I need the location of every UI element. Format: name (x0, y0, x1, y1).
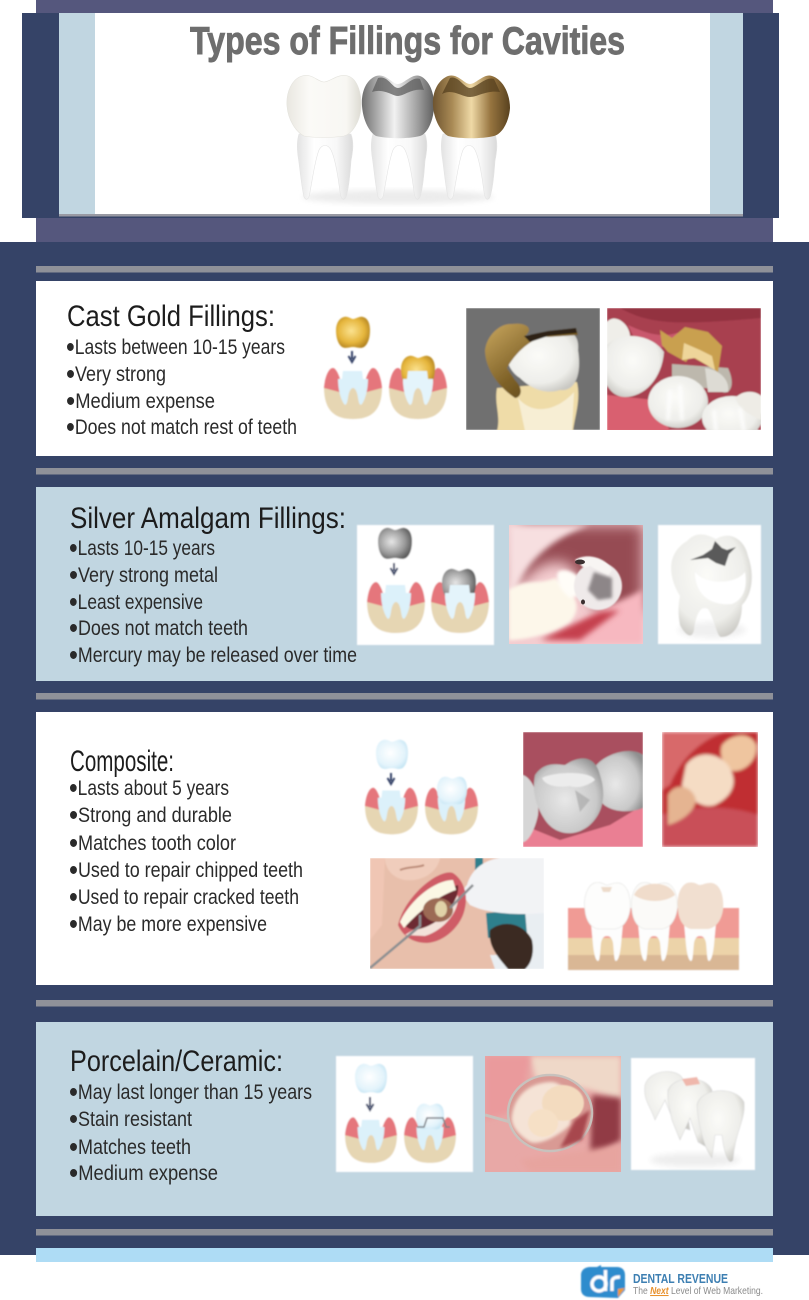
photo: molars with composite (523, 732, 643, 847)
header banner (22, 0, 779, 242)
list: silver amalgam facts: •Least expensive (69, 586, 203, 619)
wordmark: DENTAL REVENUE (633, 1272, 728, 1286)
heading: porcelain ceramic: Porcelain/Ceramic: (70, 1045, 283, 1078)
list: porcelain facts: •Stain resistant (69, 1103, 192, 1136)
list: composite facts: •Used to repair chipped teeth (69, 854, 303, 887)
heading: composite: Composite: (70, 745, 174, 778)
diagram: porcelain filling steps (336, 1056, 473, 1172)
panel: porcelain ceramic fillings (36, 1022, 773, 1216)
list: porcelain facts: •Medium expense (69, 1157, 218, 1190)
illustration: three composite teeth in gum (568, 882, 739, 970)
divider strips (36, 266, 773, 1236)
list: composite facts: •Matches tooth color (69, 827, 236, 860)
list: cast gold facts: •Does not match rest of teeth (66, 411, 297, 444)
list: porcelain facts: •Matches teeth (69, 1131, 191, 1164)
photo: dental mirror reflecting ceramic filling (485, 1056, 621, 1172)
list: composite facts: •May be more expensive (69, 908, 267, 941)
panel: composite fillings (36, 712, 773, 985)
list: composite facts (69, 772, 303, 941)
hero image: white, silver and gold crowned teeth (287, 75, 510, 204)
panel: cast gold fillings (36, 281, 773, 456)
heading: silver amalgam: Silver Amalgam Fillings: (70, 502, 346, 535)
photo: composite filled molars close-up (662, 732, 758, 847)
main background (0, 242, 809, 1255)
list: composite facts: •Strong and durable (69, 799, 232, 832)
footer band (36, 1248, 773, 1262)
diagram: composite filling steps (365, 740, 478, 834)
list: cast gold facts (66, 331, 297, 444)
list: cast gold facts: •Lasts between 10-15 years (66, 331, 285, 364)
photo: amalgam filling in mouth (509, 525, 643, 644)
diagram: silver filling steps (357, 525, 494, 645)
list: composite facts: •Lasts about 5 years (69, 772, 229, 805)
list: cast gold facts: •Medium expense (66, 385, 215, 418)
list: silver amalgam facts: •Very strong metal (69, 559, 218, 592)
three porcelain teeth (631, 1058, 755, 1170)
title: Types of Fillings for Cavities (190, 20, 625, 63)
list: porcelain facts: •May last longer than 15 years (69, 1076, 312, 1109)
diagram: gold filling steps (324, 317, 447, 419)
panel: silver amalgam fillings (36, 487, 773, 681)
list: silver amalgam facts: •Mercury may be released over time (69, 639, 357, 672)
heading: cast gold: Cast Gold Fillings: (67, 300, 275, 333)
photo: gold inlay on molar (607, 308, 762, 440)
photo: extracted tooth with gold filling (466, 308, 600, 431)
list: silver amalgam facts: •Does not match teeth (69, 612, 248, 645)
list: silver amalgam facts (69, 532, 357, 672)
photo: dentist examining patient (370, 858, 544, 969)
list: porcelain facts (69, 1076, 312, 1190)
logo: Dental Revenue (581, 1265, 763, 1298)
icon: dr speech bubble (581, 1265, 625, 1298)
list: composite facts: •Used to repair cracked teeth (69, 881, 299, 914)
tagline: The Next Level of Web Marketing. (633, 1285, 763, 1297)
list: silver amalgam facts: •Lasts 10-15 years (69, 532, 215, 565)
list: cast gold facts: •Very strong (66, 358, 166, 391)
tooth with amalgam filling (658, 525, 761, 644)
